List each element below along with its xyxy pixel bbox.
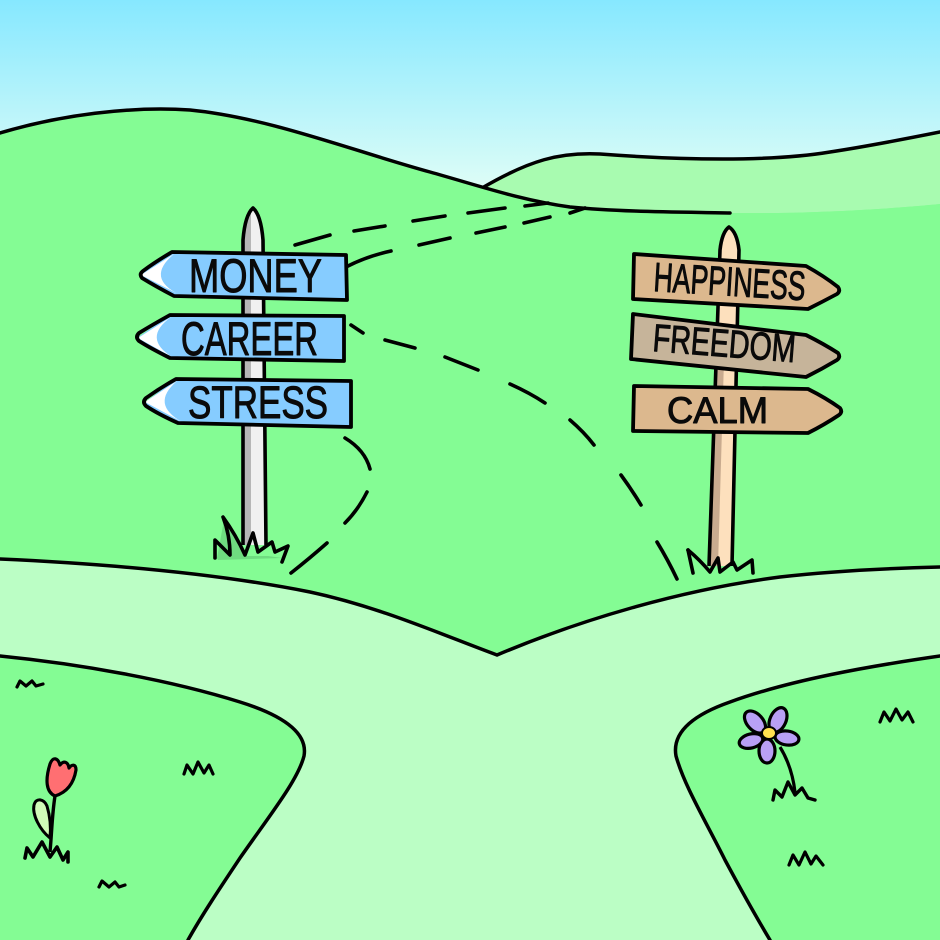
- grass tufts: [17, 681, 913, 887]
- sign: calm: CALM: [667, 390, 768, 431]
- right post: [709, 227, 739, 566]
- dashed path: stress: [291, 438, 370, 573]
- sign: happiness: HAPPINESS: [652, 254, 807, 309]
- flower: [738, 705, 815, 800]
- sign: happiness: [633, 254, 839, 309]
- tulip: [25, 759, 76, 862]
- dashed path: money upper: [295, 203, 548, 245]
- dashed path: career: [351, 325, 677, 579]
- distant hill: [482, 132, 940, 300]
- grass: right post: [688, 550, 753, 573]
- dashed path: money lower: [348, 208, 585, 266]
- sign: calm: [633, 386, 841, 433]
- left post: [243, 208, 266, 545]
- road: [0, 559, 940, 940]
- sign: money: MONEY: [189, 249, 322, 302]
- grass: left post: [215, 517, 288, 562]
- right meadow: [675, 656, 940, 940]
- main hill: [0, 109, 940, 700]
- sky: [0, 0, 940, 205]
- sign: freedom: FREEDOM: [651, 317, 797, 371]
- sign: career: [137, 312, 344, 365]
- sign: stress: STRESS: [188, 377, 328, 428]
- left meadow: [0, 656, 304, 940]
- sign: career: CAREER: [181, 312, 318, 365]
